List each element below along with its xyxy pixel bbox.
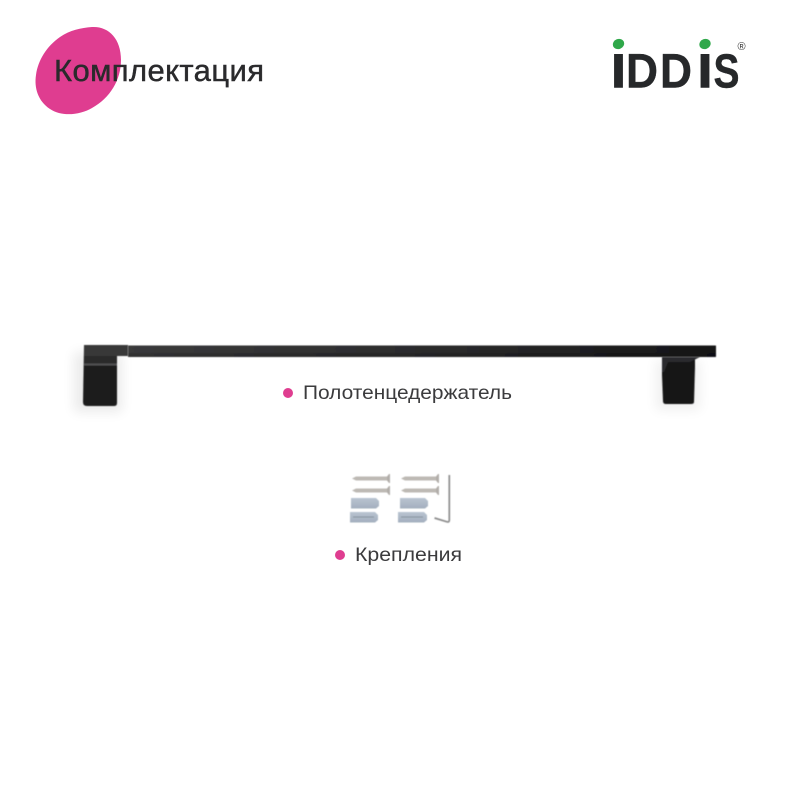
fasteners set	[350, 474, 449, 522]
label: towel holder	[283, 382, 512, 404]
towel holder product	[74, 345, 716, 412]
panel: heading badge	[36, 27, 264, 114]
icon: pink blob	[36, 27, 121, 114]
label text: Полотенцедержатель	[303, 382, 512, 404]
hex key	[434, 475, 449, 522]
logo letters: I	[697, 46, 713, 98]
label: fasteners	[335, 544, 462, 566]
left bracket	[83, 345, 128, 406]
logo dots	[611, 37, 712, 51]
rail bar	[128, 346, 716, 357]
bullet	[335, 550, 345, 560]
logo letters: D	[660, 46, 692, 98]
bullet	[283, 388, 293, 398]
soft wall shadow	[74, 352, 122, 412]
logo letters: I	[610, 46, 626, 98]
heading: Комплектация: Комплектация	[54, 53, 264, 88]
plug slits	[353, 516, 423, 518]
logo letters: D	[626, 46, 658, 98]
wall plugs	[350, 498, 428, 522]
screws	[352, 474, 439, 495]
label text: Крепления	[355, 544, 462, 566]
logo: IDDIS	[610, 37, 746, 98]
logo letters	[610, 46, 740, 98]
registered mark: ®	[738, 41, 746, 53]
logo letters: S	[714, 46, 740, 98]
soft wall shadow right	[656, 360, 700, 410]
right bracket	[662, 357, 700, 404]
